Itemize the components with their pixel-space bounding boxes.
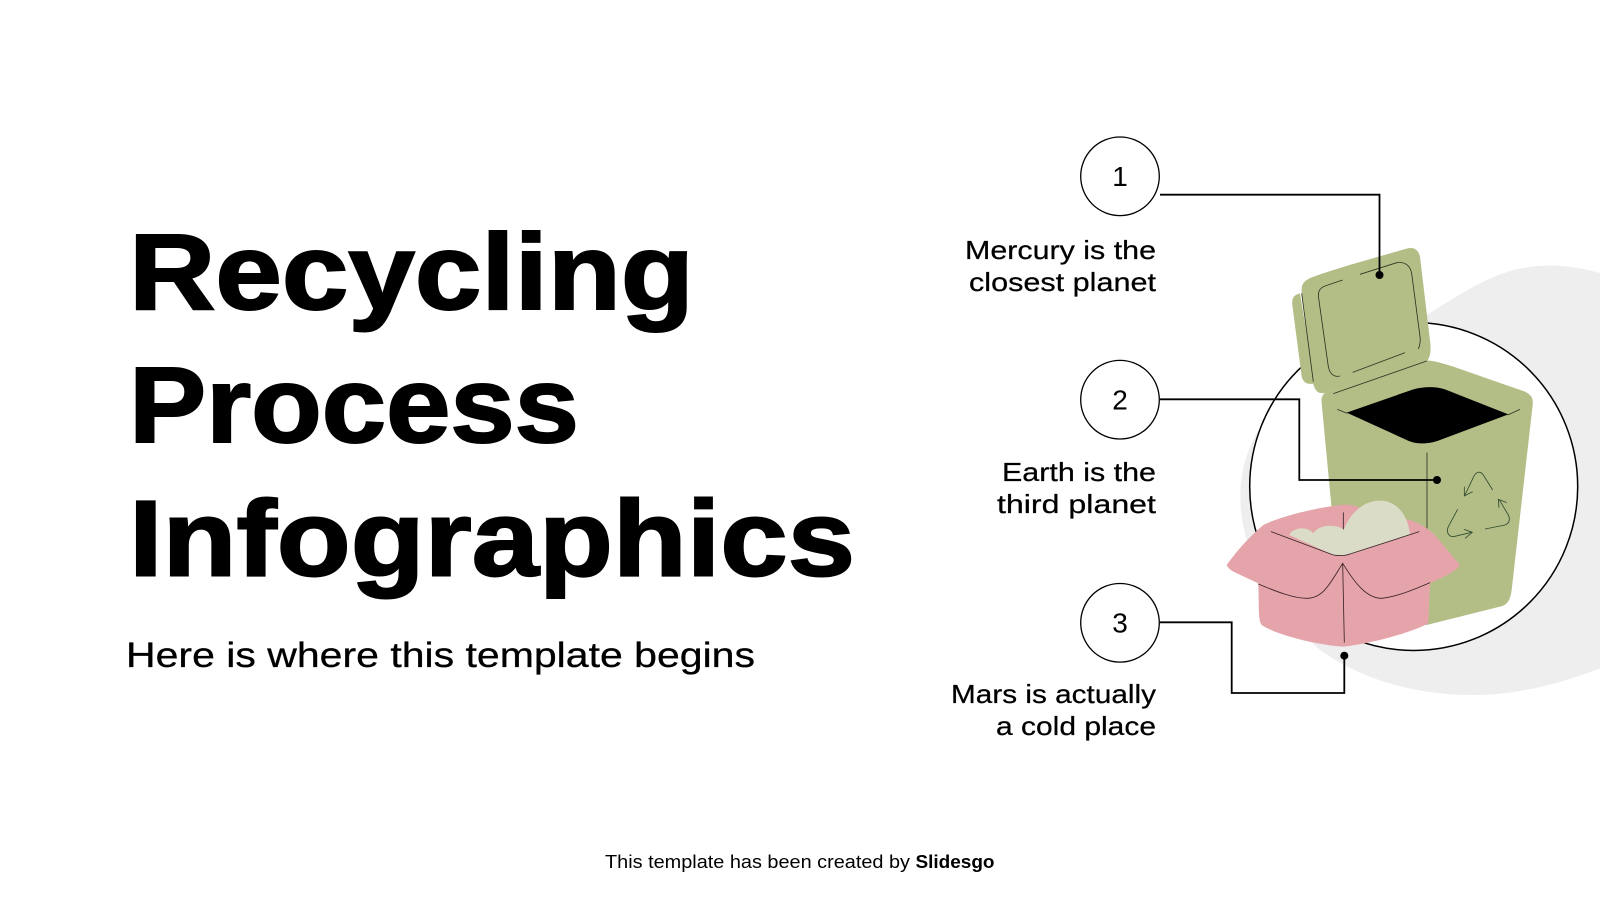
callout 1: number circle xyxy=(1081,137,1159,216)
callout 1: leader line to lid xyxy=(1160,195,1384,279)
callout 3: text: Mars is actually xyxy=(951,679,1156,709)
callout 2: text: third planet xyxy=(997,489,1157,519)
recycling bin body xyxy=(1321,360,1533,625)
title: Recycling xyxy=(129,211,694,332)
background blob xyxy=(1240,266,1600,695)
title: Infographics xyxy=(129,478,855,598)
callout 1: text: Mercury is the xyxy=(965,235,1156,265)
callout 3: number circle xyxy=(1081,584,1159,662)
white circle behind illustration xyxy=(1250,322,1578,650)
callout 2: leader line to bin xyxy=(1160,399,1441,484)
callout 3: text: a cold place xyxy=(996,711,1156,741)
illustration: recycling bin and box xyxy=(1227,248,1533,647)
bin lid xyxy=(1292,248,1431,394)
cardboard box xyxy=(1227,501,1460,647)
callout 3: text xyxy=(951,679,1156,741)
icon: recycling arrows xyxy=(1447,472,1509,538)
callout 2: text xyxy=(997,457,1157,519)
title: Process xyxy=(129,344,579,465)
callout 3: leader line to box xyxy=(1160,622,1348,693)
callout 1: number circle: 1 xyxy=(1112,161,1128,192)
callout 2: number circle: 2 xyxy=(1112,384,1128,416)
callout 2: text: Earth is the xyxy=(1002,457,1156,487)
callout 1: text: closest planet xyxy=(969,267,1157,297)
title xyxy=(129,211,855,598)
footer credit: This template has been created by xyxy=(605,852,910,872)
callout 2: number circle xyxy=(1081,360,1159,439)
footer credit: Slidesgo xyxy=(916,852,995,872)
callout 3: number circle: 3 xyxy=(1112,608,1128,638)
subtitle: Here is where this template begins xyxy=(126,636,755,675)
callout 1: text xyxy=(965,235,1157,297)
